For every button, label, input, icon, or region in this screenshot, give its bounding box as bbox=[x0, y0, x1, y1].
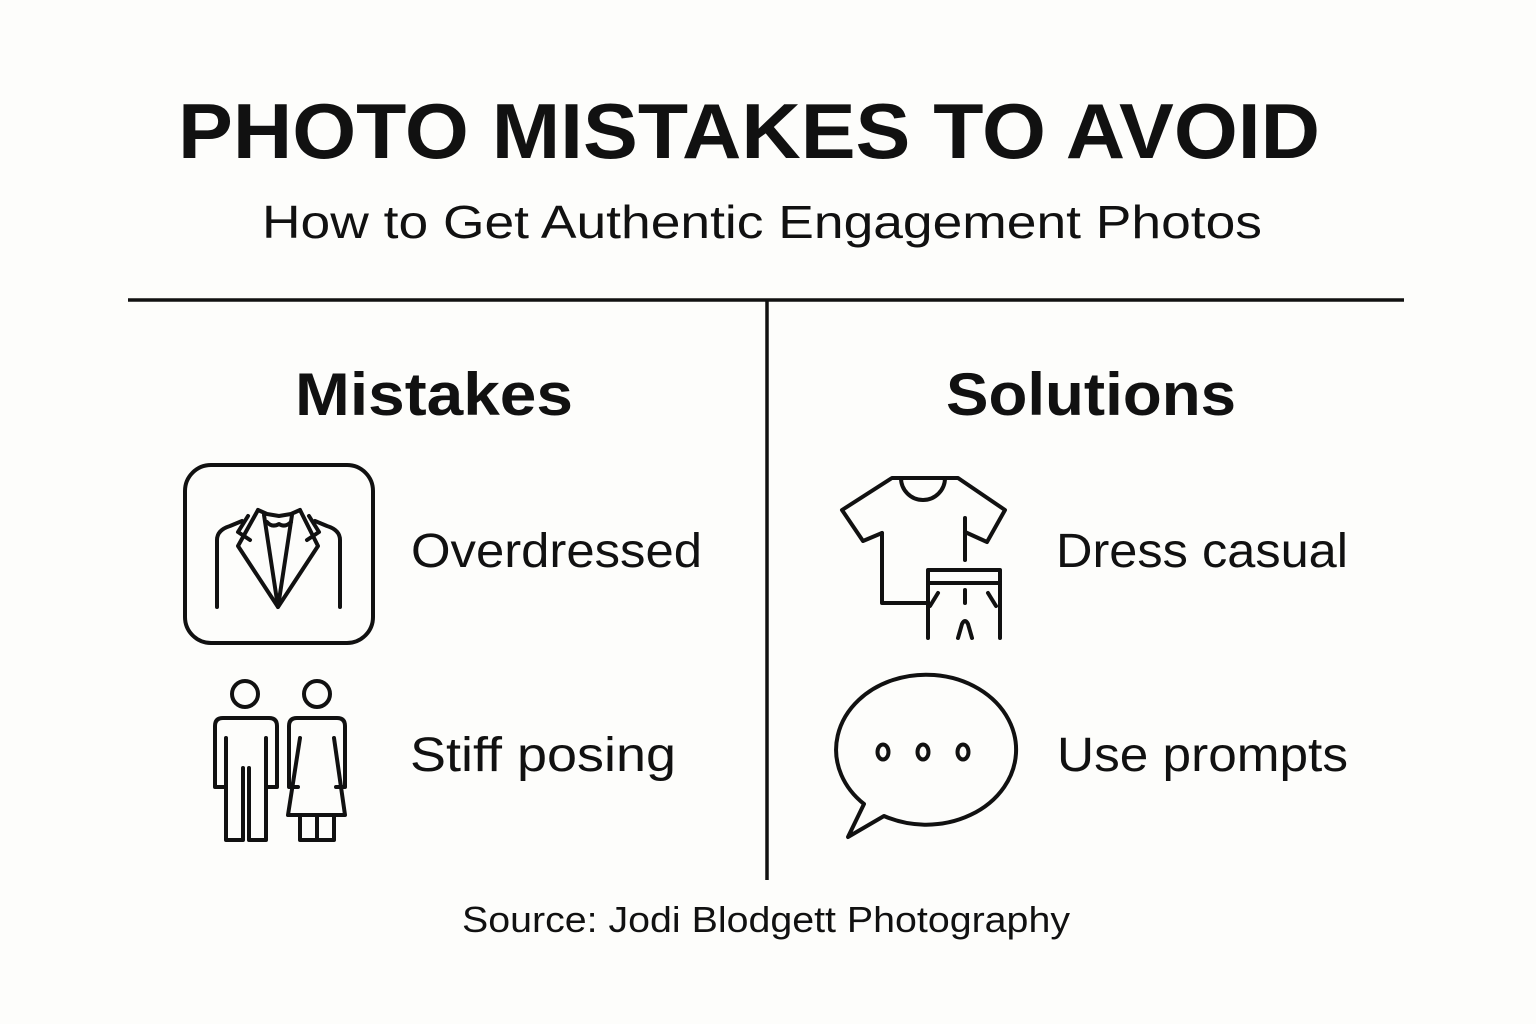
icon: casual clothes bbox=[842, 478, 1005, 638]
heading: Solutions: Solutions bbox=[946, 361, 1236, 428]
icon: suit bbox=[185, 465, 373, 643]
title: PHOTO MISTAKES TO AVOID bbox=[178, 87, 1320, 175]
icon: couple bbox=[215, 681, 345, 840]
icon: speech bubble bbox=[836, 675, 1016, 837]
subtitle: How to Get Authentic Engagement Photos bbox=[262, 196, 1262, 248]
label: Dress casual: Dress casual bbox=[1056, 525, 1348, 578]
label: Use prompts: Use prompts bbox=[1057, 729, 1348, 782]
heading: Mistakes: Mistakes bbox=[295, 361, 573, 428]
label: Stiff posing: Stiff posing bbox=[410, 729, 676, 782]
label: Overdressed: Overdressed bbox=[411, 525, 702, 578]
source: Source: Jodi Blodgett Photography bbox=[462, 899, 1070, 940]
